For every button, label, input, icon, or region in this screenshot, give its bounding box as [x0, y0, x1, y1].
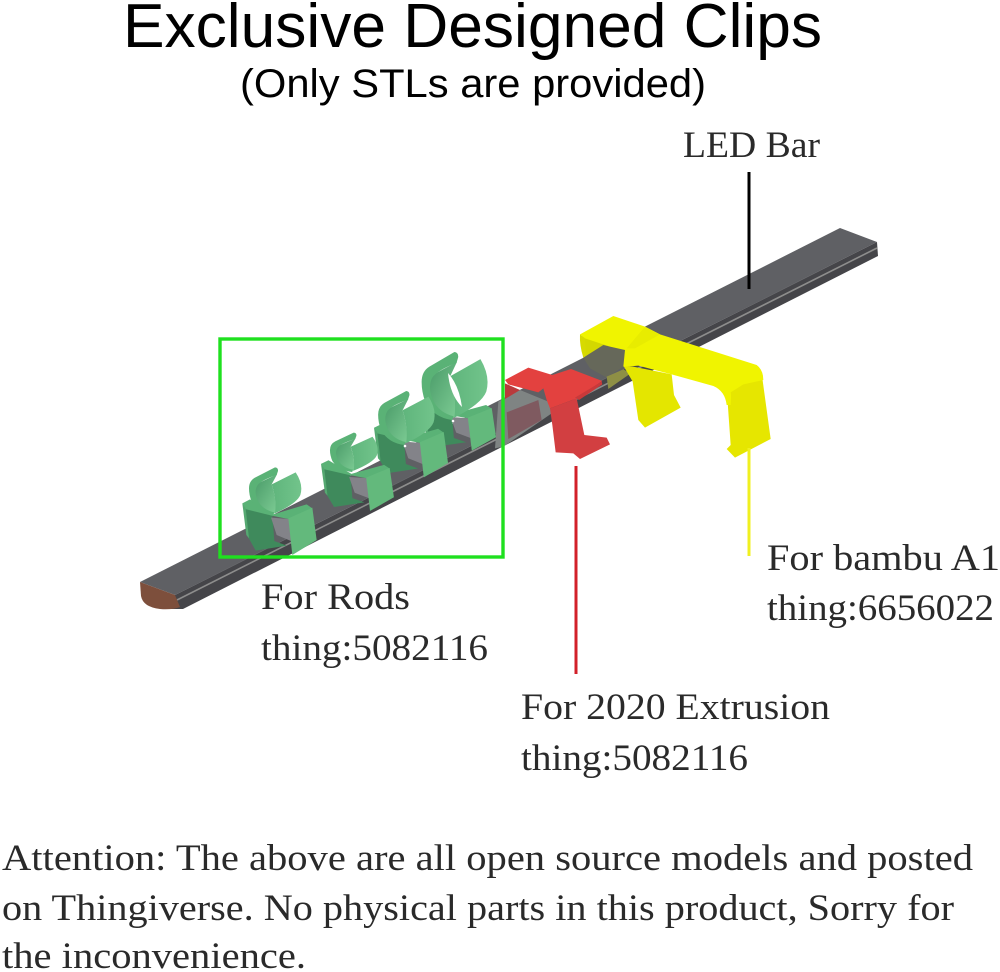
see-through bar section under the red clip: [495, 390, 552, 448]
attention note: Attention: The above are all open source models and posted: [2, 838, 974, 879]
attention note: [2, 838, 974, 972]
label: For 2020 Extrusion: For 2020 Extrusion: [521, 687, 830, 728]
label: For Rods: For Rods: [261, 577, 410, 618]
attention note: on Thingiverse. No physical parts in this product, Sorry for: [2, 888, 954, 929]
label: LED Bar: LED Bar: [683, 125, 820, 166]
label: rods thing number: thing:5082116: [261, 628, 488, 669]
clip 1: [242, 467, 317, 555]
clip 4: [422, 352, 496, 451]
red extrusion clip: [505, 368, 610, 459]
label: bambu thing number: thing:6656022: [767, 588, 994, 629]
LED bar: [140, 228, 878, 609]
clip 3: [374, 391, 448, 477]
green rod clips: [242, 352, 496, 555]
clip 2: [321, 433, 394, 511]
label: For bambu A1: For bambu A1: [767, 538, 1000, 579]
yellow A1 clip: [580, 316, 771, 458]
see-through bar section under the yellow clip: [583, 343, 631, 389]
subtitle: (Only STLs are provided): [240, 62, 706, 106]
green selection box: [220, 339, 503, 557]
LED bar pointer line: [748, 172, 750, 289]
label: extrusion thing number: thing:5082116: [521, 738, 748, 779]
yellow pointer line: [748, 448, 750, 556]
red pointer line: [574, 466, 578, 674]
